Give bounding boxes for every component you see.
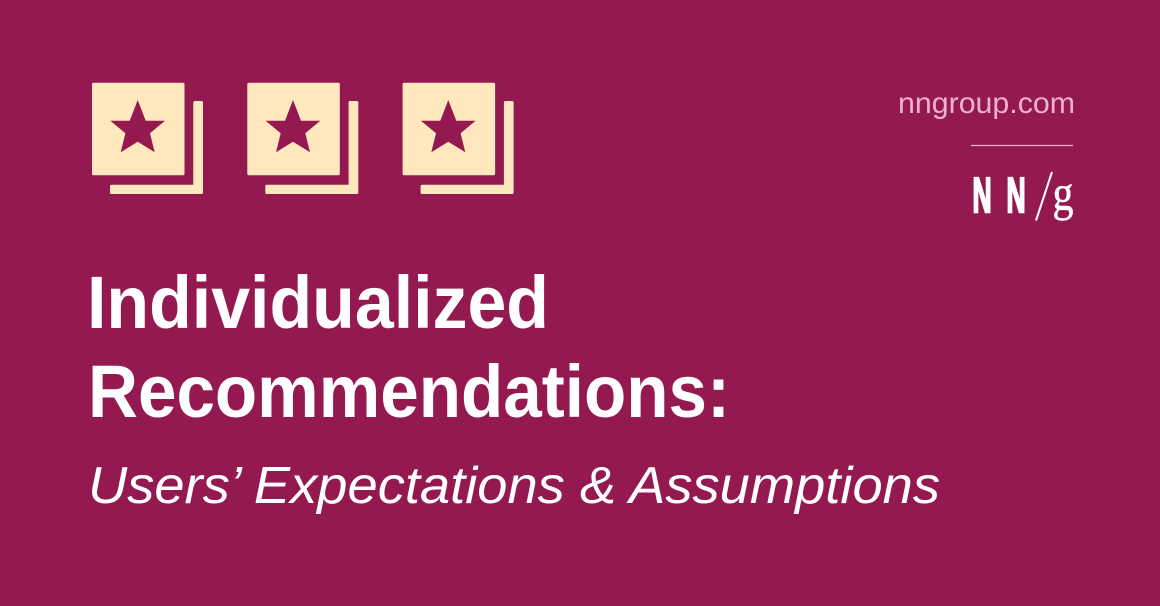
logo: NN/g (972, 165, 1074, 223)
icon: recommendation card with star 3 (403, 83, 514, 194)
title: Individualized (87, 261, 549, 344)
logo: NN/g: g (1052, 165, 1074, 221)
site url: nngroup.com (898, 87, 1075, 120)
icon: recommendation card with star 1 (92, 83, 203, 194)
title: Recommendations: (88, 350, 730, 433)
logo: NN/g: NN (972, 168, 1026, 223)
icon: recommendation card with star 2 (247, 83, 358, 194)
subtitle: Users’ Expectations & Assumptions (88, 457, 940, 515)
title (87, 261, 730, 433)
